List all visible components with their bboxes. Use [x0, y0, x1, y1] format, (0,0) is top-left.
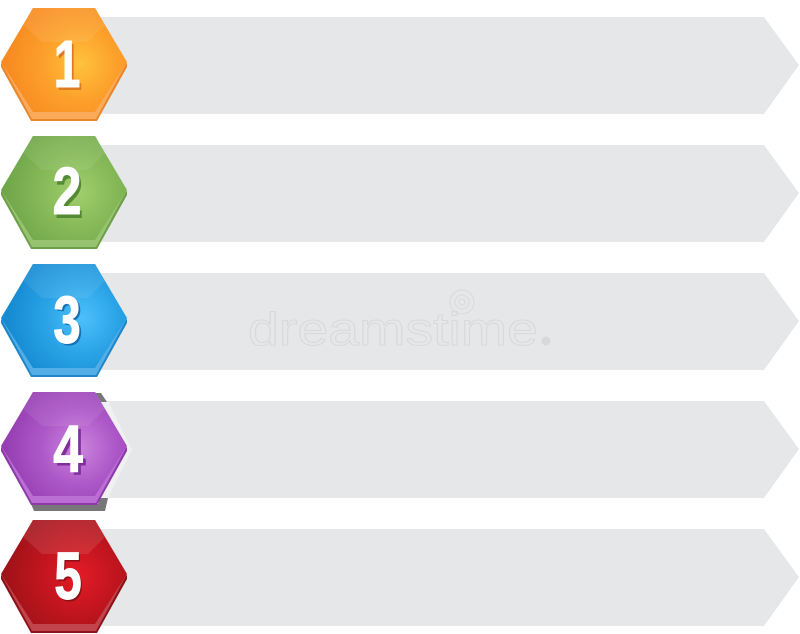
icon: hexagon badge 4 with drop shadow — [1, 392, 132, 511]
number 3: 3 — [53, 284, 81, 358]
number 5: 5 — [56, 542, 83, 616]
panel: row 3 arrow bar — [100, 273, 799, 370]
watermark: dreamstime — [248, 303, 538, 355]
number 5: 5 — [54, 540, 82, 614]
number 3: 3 — [55, 286, 83, 360]
icon: hexagon badge 1 — [1, 8, 127, 121]
panel: row 1 arrow bar — [100, 17, 799, 114]
shadow — [31, 393, 108, 511]
number 4: 4 — [56, 414, 86, 489]
panel: row 5 arrow bar — [100, 529, 799, 626]
watermark — [248, 290, 550, 355]
icon: hexagon badge 2 — [1, 136, 127, 249]
icon: hexagon badge 5 — [1, 520, 127, 633]
number 4: 4 — [53, 411, 83, 486]
panel: row 4 arrow bar — [100, 401, 799, 498]
number 1: 1 — [54, 27, 80, 102]
number 1: 1 — [56, 30, 83, 105]
panel: row 2 arrow bar — [100, 145, 799, 242]
glow over bar — [98, 401, 132, 498]
number 2: 2 — [55, 158, 84, 232]
icon: hexagon badge 3 — [1, 264, 127, 377]
number 2: 2 — [52, 154, 82, 228]
